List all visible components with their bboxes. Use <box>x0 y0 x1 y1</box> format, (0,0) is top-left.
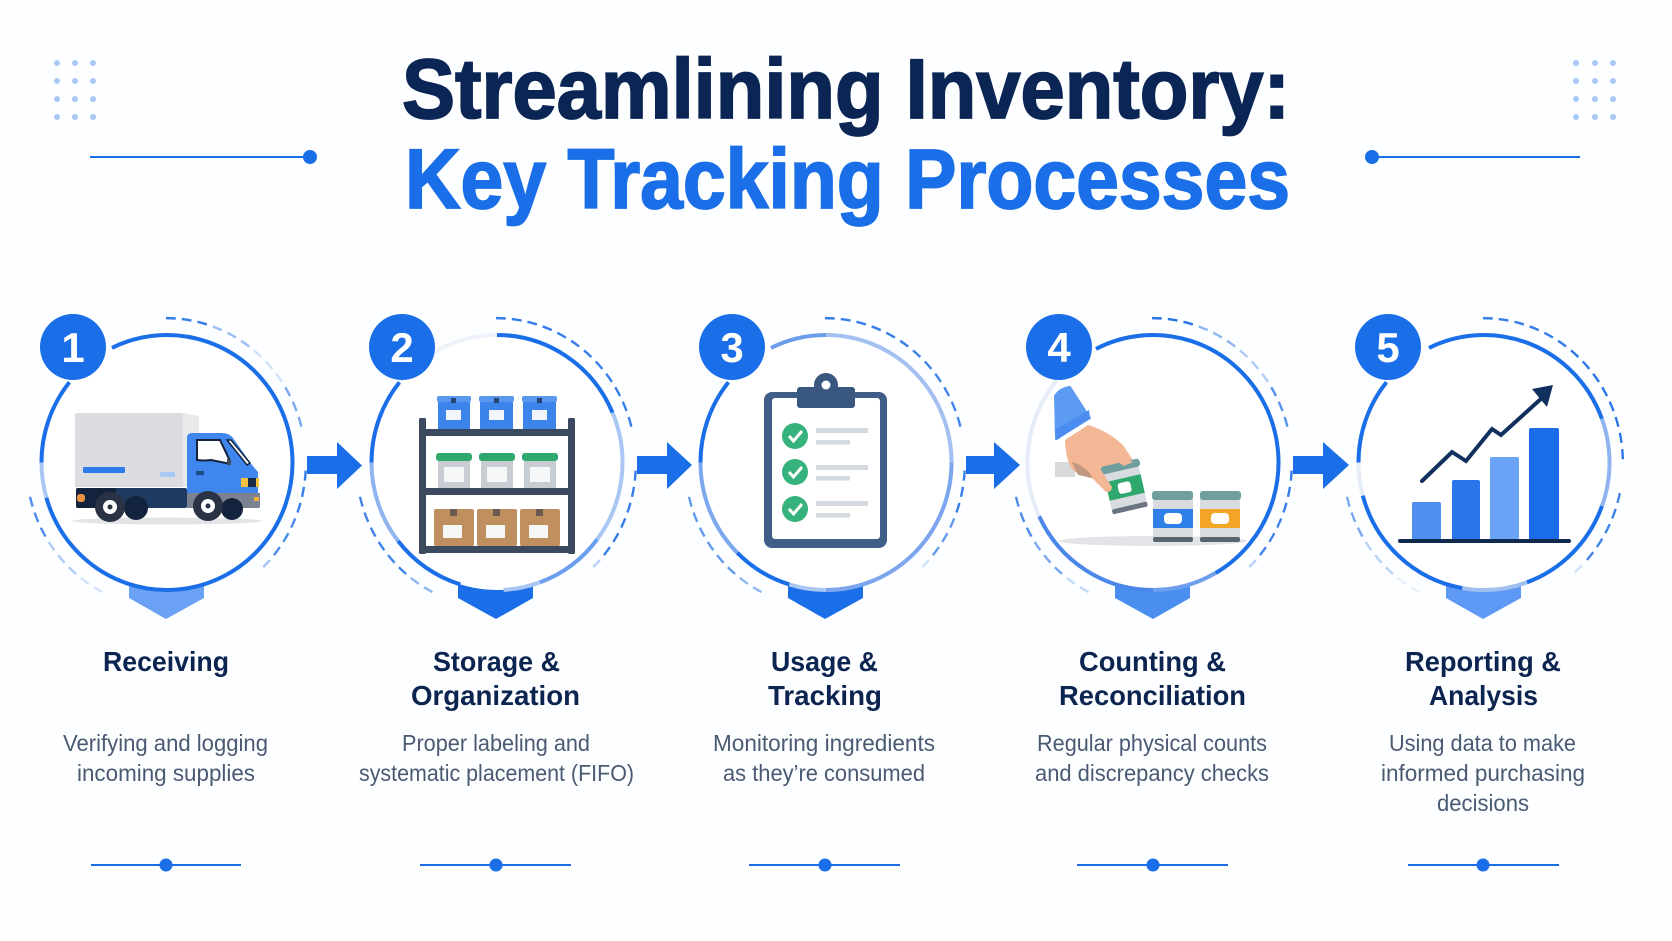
check 1 <box>782 423 868 449</box>
heading 5 <box>1405 646 1561 711</box>
badge 5: 5 <box>1376 324 1400 371</box>
palm shadow <box>1072 462 1093 478</box>
heading 4: Reconciliation <box>1059 680 1246 711</box>
icon: hand counting cans <box>1055 387 1247 546</box>
heading 1: Receiving <box>103 646 229 677</box>
ring 3 <box>649 282 1003 643</box>
heading 3: Usage & <box>771 646 878 677</box>
badge 3: 3 <box>720 324 744 371</box>
description 5: Using data to make <box>1389 730 1576 756</box>
pointer 2 <box>458 580 533 619</box>
heading 3: Tracking <box>768 680 882 711</box>
check 3 <box>782 496 868 522</box>
description 5: decisions <box>1437 790 1529 816</box>
green lidded bins <box>436 453 558 488</box>
title: Key Tracking Processes <box>405 132 1290 226</box>
ring 4 <box>982 288 1324 637</box>
dashed arcs 2 <box>298 258 694 668</box>
thumb and finger <box>1092 453 1133 492</box>
header line right <box>1365 150 1580 164</box>
description 3: Monitoring ingredients <box>713 730 935 756</box>
cardboard boxes <box>434 509 560 546</box>
footer line 2 <box>420 858 571 872</box>
panel: step 3 usage <box>627 258 1023 872</box>
panel: step 1 receiving <box>0 258 364 872</box>
heading 4 <box>1059 646 1246 711</box>
ring 1 <box>0 292 335 633</box>
dashed arcs 1 <box>0 258 364 668</box>
pointer 5 <box>1446 580 1521 619</box>
hand <box>1065 425 1134 478</box>
description 2 <box>359 730 634 786</box>
heading 5: Reporting & <box>1405 646 1561 677</box>
heading 4: Counting & <box>1079 646 1226 677</box>
heading 2: Organization <box>411 680 580 711</box>
blue bins <box>437 396 557 429</box>
sleeve <box>1055 387 1090 439</box>
description 5 <box>1381 730 1585 816</box>
dashed arcs 3 <box>627 258 1023 668</box>
arrow 2 to 3 <box>637 442 692 489</box>
badge 3 <box>699 314 765 380</box>
arrow 4 to 5 <box>1293 442 1349 489</box>
description 3: as they’re consumed <box>723 760 925 786</box>
description 2: Proper labeling and <box>402 730 590 756</box>
shelf frame <box>419 418 575 554</box>
arrow 3 to 4 <box>966 442 1020 489</box>
tilted can <box>1100 458 1150 515</box>
badge 2 <box>369 314 435 380</box>
badge 1 <box>40 314 106 380</box>
badge 1: 1 <box>61 324 85 371</box>
description 1: incoming supplies <box>77 760 255 786</box>
badge 5 <box>1355 314 1421 380</box>
title <box>402 42 1290 226</box>
blue can <box>1152 491 1193 542</box>
badge 4 <box>1026 314 1092 380</box>
description 4 <box>1035 730 1269 786</box>
orange can <box>1200 491 1241 542</box>
title: Streamlining Inventory: <box>402 42 1290 136</box>
check 2 <box>782 459 868 485</box>
badge 2: 2 <box>390 324 414 371</box>
header line left <box>90 150 317 164</box>
footer line 3 <box>749 858 900 872</box>
pointer 4 <box>1115 580 1190 619</box>
description 4: and discrepancy checks <box>1035 760 1269 786</box>
heading 3 <box>768 646 882 711</box>
heading 2 <box>411 646 580 711</box>
icon: bar chart with rising arrow <box>1400 385 1569 541</box>
badge 4: 4 <box>1047 324 1071 371</box>
description 3 <box>713 730 935 786</box>
panel: step 4 counting <box>954 258 1350 872</box>
ring 2 <box>320 283 674 642</box>
pointer 3 <box>788 580 863 619</box>
heading 2: Storage & <box>433 646 560 677</box>
panel: step 5 reporting <box>1285 258 1672 872</box>
panel: step 2 storage <box>298 258 694 872</box>
heading 5: Analysis <box>1429 680 1538 711</box>
icon: clipboard checklist <box>764 373 887 548</box>
description 4: Regular physical counts <box>1037 730 1267 756</box>
dashed arcs 4 <box>954 258 1350 668</box>
decorative dot grid left <box>54 60 96 120</box>
footer line 4 <box>1077 858 1228 872</box>
decorative dot grid right <box>1573 60 1616 120</box>
pointer 1 <box>129 580 204 619</box>
icon: truck <box>72 413 262 524</box>
footer line 1 <box>91 858 241 872</box>
ring 5 <box>1316 292 1652 633</box>
footer line 5 <box>1408 858 1559 872</box>
dashed arcs 5 <box>1285 258 1672 668</box>
description 2: systematic placement (FIFO) <box>359 760 634 786</box>
description 5: informed purchasing <box>1381 760 1585 786</box>
description 1 <box>63 730 268 786</box>
cuff <box>1055 410 1090 440</box>
icon: shelving with bins and boxes <box>419 396 575 554</box>
description 1: Verifying and logging <box>63 730 268 756</box>
arrow 1 to 2 <box>307 442 362 489</box>
